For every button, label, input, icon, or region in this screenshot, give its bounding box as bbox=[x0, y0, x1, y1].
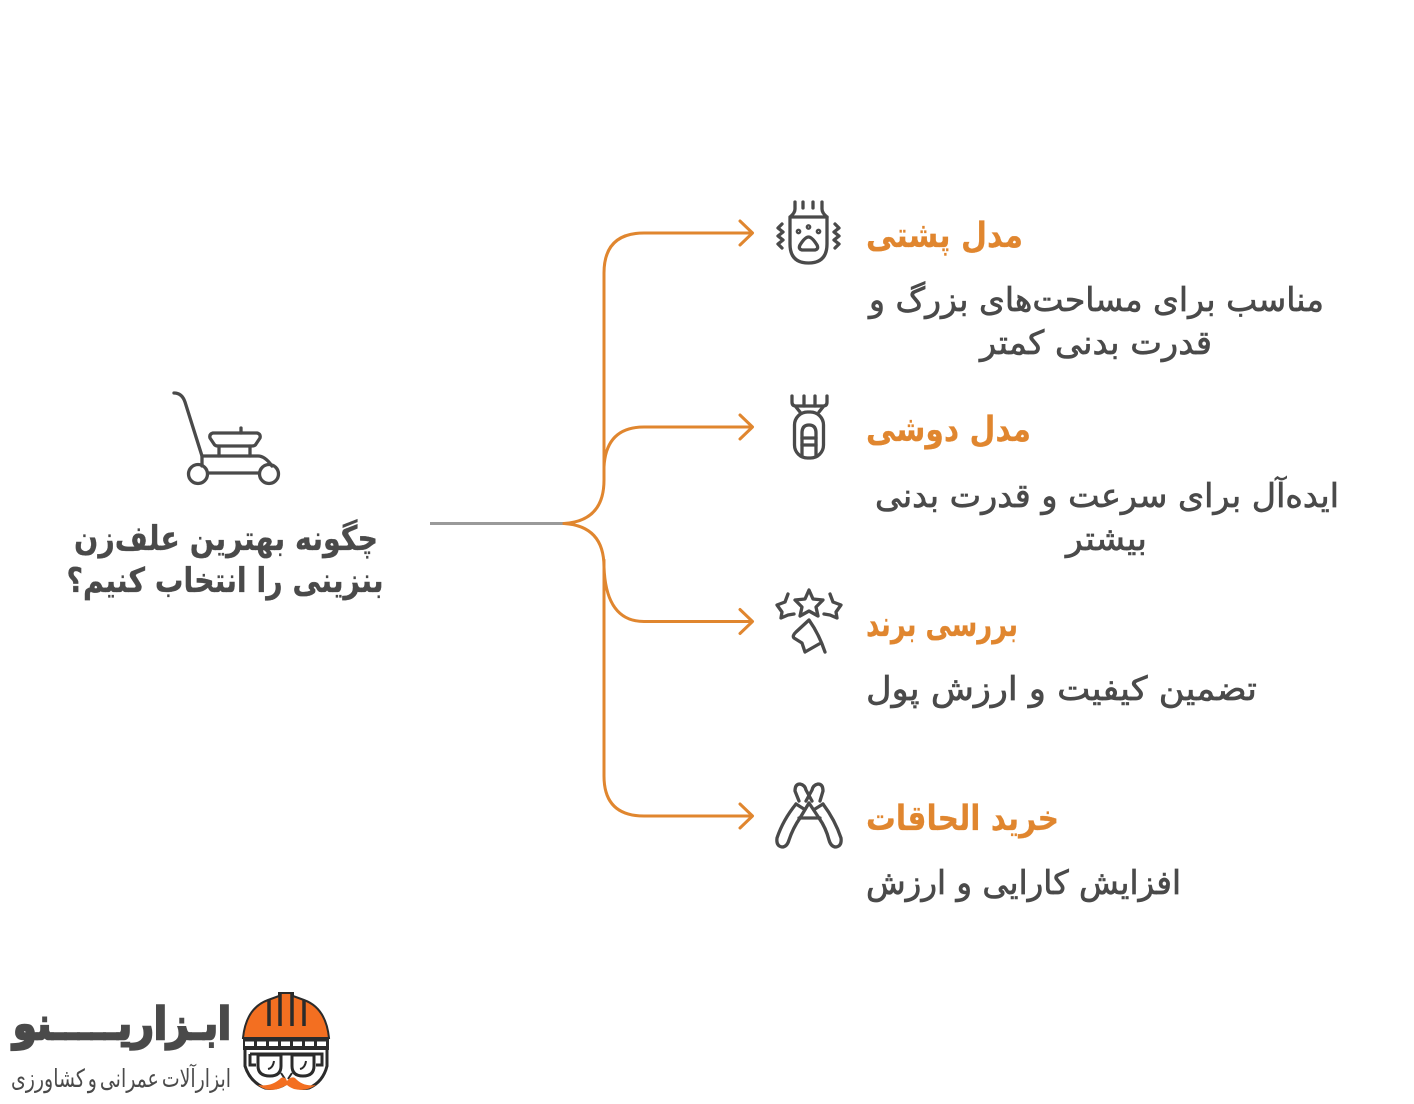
icon: brand rating stars bbox=[777, 590, 841, 652]
icon: shoulder trimmer bbox=[792, 396, 827, 458]
logo helmet mascot bbox=[243, 993, 329, 1090]
icon: attachments pliers bbox=[777, 784, 841, 847]
title: چگونه بهترین علف‌زن bbox=[74, 519, 378, 559]
text: backpack model description: مناسب برای مساحت‌های بزرگ و bbox=[867, 280, 1324, 319]
title: بنزینی را انتخاب کنیم؟ bbox=[66, 561, 384, 601]
heading: buying attachments: خرید الحاقات bbox=[866, 799, 1059, 839]
text: shoulder model description bbox=[875, 476, 1339, 558]
logo: abzarino bbox=[11, 993, 329, 1094]
text: attachments description: افزایش کارایی و ارزش bbox=[866, 863, 1181, 902]
icon: backpack trimmer bbox=[778, 202, 839, 263]
heading: backpack model: مدل پشتی bbox=[866, 216, 1023, 256]
heading: brand review: بررسی برند bbox=[866, 605, 1018, 645]
logo wordmark: ابـزاریـــــنو bbox=[11, 999, 231, 1050]
icon: lawn mower bbox=[174, 393, 278, 484]
text: shoulder model description: بیشتر bbox=[1064, 519, 1147, 558]
text: shoulder model description: ایده‌آل برای سرعت و قدرت بدنی bbox=[875, 476, 1339, 515]
logo tagline: ابزارآلات عمرانی و کشاورزی bbox=[11, 1063, 231, 1094]
text: backpack model description: قدرت بدنی کمتر bbox=[978, 323, 1212, 362]
heading: shoulder model: مدل دوشی bbox=[866, 410, 1031, 450]
title bbox=[66, 519, 384, 601]
connector: stem bbox=[430, 522, 566, 525]
text: backpack model description bbox=[867, 280, 1324, 362]
connector: branching arrows bbox=[564, 221, 752, 828]
text: brand review description: تضمین کیفیت و ارزش پول bbox=[866, 669, 1257, 708]
